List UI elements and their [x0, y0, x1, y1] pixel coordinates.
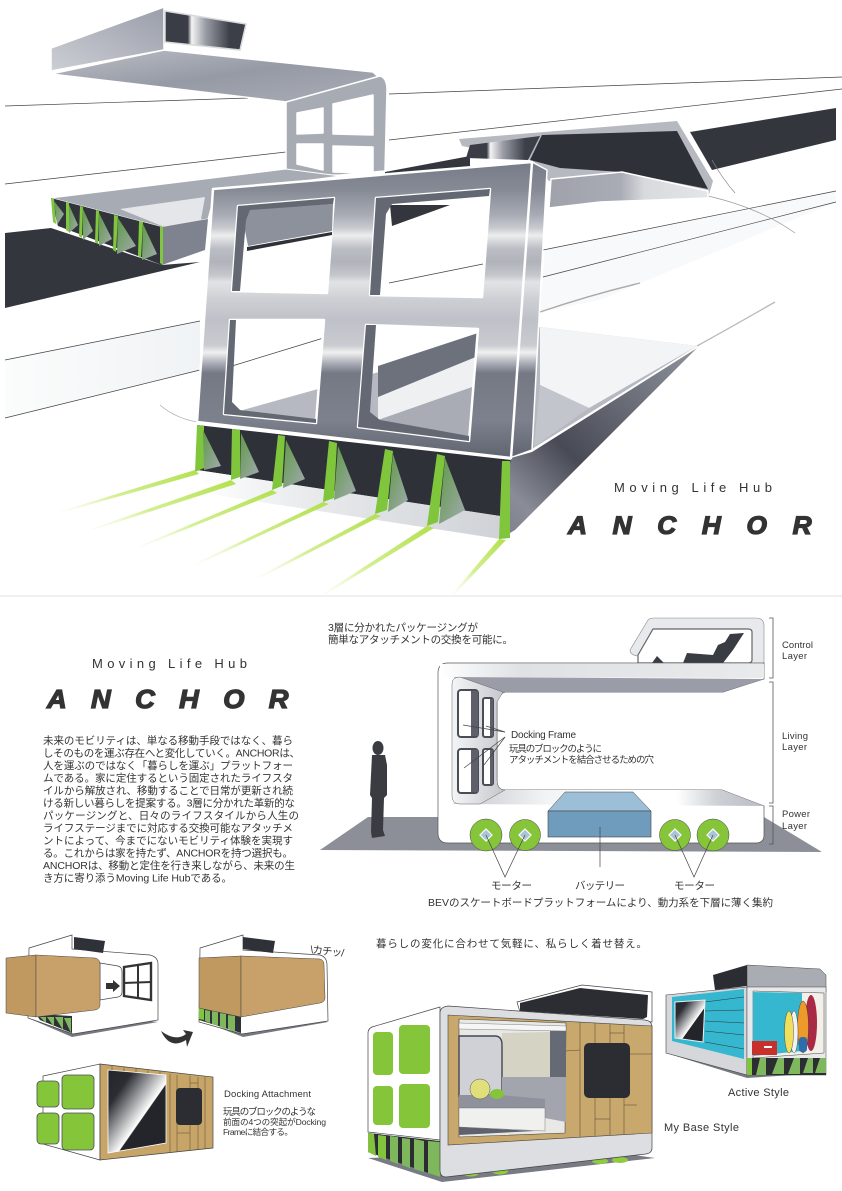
shelf — [459, 1023, 566, 1031]
body — [199, 935, 328, 1034]
left wall — [452, 677, 505, 804]
concept body text: き方に寄り添うMoving Life Hubである。 — [43, 872, 232, 884]
green teeth under main frame — [195, 425, 510, 539]
surfboards — [805, 995, 817, 1051]
leaf cushion — [490, 1089, 504, 1099]
motors — [470, 819, 729, 851]
main frame side wall — [510, 162, 547, 458]
concept body text: イルから解放され、移動することで日常が更新され続 — [43, 784, 294, 797]
concept body text: ムである。家に定住するという固定されたライフスタ — [43, 772, 293, 784]
power labels: BEVのスケートボードプラットフォームにより、動力系を下層に薄く集約 — [428, 896, 773, 909]
body front frame — [440, 1006, 652, 1177]
black roof — [713, 965, 747, 990]
click sound text: \カチッ/ — [310, 944, 345, 960]
floor behind main frame — [243, 327, 697, 458]
layer labels: Living — [782, 731, 808, 742]
teeth — [747, 1058, 826, 1075]
attachment box — [6, 955, 100, 1017]
large gradient window — [108, 1070, 166, 1153]
roof gradient — [440, 664, 764, 678]
power labels: モーター — [674, 880, 715, 892]
main floor underside white — [197, 470, 500, 539]
background perspective wash — [5, 191, 836, 418]
cushion — [470, 1079, 490, 1099]
docking attachment — [37, 1064, 326, 1160]
upper module roof panel — [51, 7, 164, 71]
floor — [459, 1127, 535, 1135]
control layer cab — [630, 618, 764, 665]
vehicle body — [438, 663, 764, 843]
hero subtitle: Moving Life Hub — [614, 480, 772, 495]
upper module frame — [286, 76, 387, 176]
main frame with four windows — [197, 162, 532, 458]
layer labels: Layer — [782, 651, 807, 662]
concept body text: る。これからは家を持たず、ANCHORを持つ選択も。 — [43, 846, 293, 860]
black roof — [520, 988, 648, 1019]
concept body text — [43, 734, 300, 884]
upper module visible through window — [241, 204, 333, 246]
attachment step 1 — [6, 935, 158, 1037]
battery — [548, 792, 651, 837]
living layer ceiling shade — [453, 677, 764, 692]
leader lines — [463, 725, 713, 877]
docking attachment note — [223, 1089, 326, 1137]
ground — [666, 1053, 826, 1078]
attachment left face — [43, 1064, 100, 1160]
docking frame annotation — [509, 730, 654, 766]
docking frame annotation: 玩具のブロックのように — [509, 743, 602, 755]
green light beams — [58, 470, 506, 596]
wheels — [463, 1157, 628, 1176]
my base style label: My Base Style — [664, 1122, 739, 1134]
ground — [368, 1150, 655, 1182]
right compartment — [747, 987, 826, 1075]
layer caption: 簡単なアタッチメントの交換を可能に。 — [328, 633, 513, 646]
active style label: Active Style — [728, 1087, 789, 1099]
small dark window — [176, 1088, 202, 1125]
docking attachment note: 前面の4つの突起がDocking — [223, 1116, 326, 1127]
docking frame windows — [458, 690, 493, 793]
3-layer side diagram — [320, 618, 822, 909]
active style vehicle — [666, 965, 826, 1078]
teeth — [36, 1014, 72, 1033]
my base style vehicle — [368, 985, 655, 1182]
dress-up caption: 暮らしの変化に合わせて気軽に、私らしく着せ替え。 — [376, 937, 647, 950]
concept title ANCHOR: ANCHOR — [46, 685, 289, 714]
docking attachment note: Frameに結合する。 — [223, 1126, 293, 1137]
concept body text: 未来のモビリティは、単なる移動手段ではなく、暮ら — [43, 734, 293, 747]
layer labels: Control — [782, 640, 813, 651]
person silhouette — [370, 741, 387, 838]
green windows — [373, 1025, 430, 1128]
teeth — [199, 1008, 241, 1033]
room interior — [459, 1019, 566, 1137]
right dark wall — [550, 1031, 566, 1077]
main frame lower dark base — [197, 425, 511, 516]
layer labels: Layer — [782, 742, 807, 753]
left face — [368, 1007, 440, 1140]
concept body text: しそのものを運ぶ存在へと変化していく。ANCHORは、 — [43, 746, 300, 760]
top band — [747, 965, 826, 992]
attachment wood face — [100, 1064, 213, 1160]
docking attachment note: Docking Attachment — [224, 1089, 311, 1100]
window rims — [224, 189, 490, 441]
concept body text: ライフステージまでに対応する交換可能なアタッチメ — [43, 822, 293, 834]
cockpit — [243, 937, 275, 953]
layer caption: 3層に分かれたパッケージングが — [328, 621, 478, 634]
ground — [320, 817, 822, 852]
upper module slab underside — [51, 50, 386, 102]
back wall — [502, 1032, 550, 1077]
living layer floor shade — [452, 790, 764, 806]
left partition — [459, 1036, 502, 1096]
ground — [28, 1015, 158, 1037]
bed — [459, 1095, 545, 1108]
upper module cockpit — [165, 11, 246, 50]
attached box — [199, 956, 325, 1017]
layer caption — [328, 621, 513, 646]
wood panelling — [448, 1015, 652, 1145]
power labels — [428, 880, 773, 909]
layer labels — [782, 640, 813, 832]
docking frame annotation: Docking Frame — [511, 730, 576, 741]
docking frame annotation: アタッチメントを結合させるための穴 — [509, 754, 654, 766]
upper module — [51, 7, 387, 265]
concept text panel — [43, 656, 300, 884]
cab seat — [683, 633, 744, 663]
teeth — [368, 1133, 440, 1177]
ground — [199, 1015, 328, 1037]
power labels: モーター — [491, 880, 532, 892]
louver lines — [705, 997, 744, 1049]
left body — [666, 987, 747, 1075]
curved arrow — [161, 1030, 193, 1047]
red box — [752, 1041, 777, 1055]
black wall screen — [584, 1043, 630, 1098]
concept body text: ける新しい暮らしを提案する。3層に分かれた革新的な — [43, 796, 295, 810]
concept body text: ANCHORは、移動と定住を行き来しながら、未来の生 — [43, 859, 295, 872]
section divider — [0, 595, 842, 597]
power labels: バッテリー — [575, 880, 625, 892]
concept body text: 人を運ぶのではなく「暮らしを運ぶ」プラットフォー — [43, 759, 293, 772]
layer labels: Power — [782, 809, 810, 820]
lower wall — [502, 1077, 566, 1122]
attachment step 2 — [199, 935, 345, 1037]
body — [28, 935, 158, 1034]
layer brackets — [769, 618, 773, 844]
canopy — [517, 985, 652, 1022]
docking attachment note: 玩具のブロックのような — [223, 1106, 316, 1118]
hero illustration: ANCHOR vehicle — [5, 7, 842, 596]
upper module teeth — [51, 198, 163, 265]
docking frame window — [124, 963, 151, 1000]
arrow — [106, 980, 120, 992]
cyan side panel — [672, 989, 744, 1059]
dark background band — [5, 108, 836, 308]
gradient window — [675, 1000, 705, 1042]
rear canopy and cockpit — [459, 121, 713, 208]
concept body text: パッケージングと、日々のライフスタイルから人生の — [43, 809, 299, 822]
hero title ANCHOR: ANCHOR — [567, 513, 812, 540]
side shadow wedge — [500, 348, 697, 539]
concept body text: ントによって、今までにないモビリティ体験を実現す — [43, 834, 293, 847]
four green docking protrusions — [37, 1075, 94, 1150]
concept subtitle: Moving Life Hub — [92, 656, 247, 671]
perspective hairlines — [5, 77, 842, 422]
upper module floor edge — [162, 219, 208, 265]
upper module floor — [51, 169, 340, 227]
opening — [100, 963, 122, 1000]
layer labels: Layer — [782, 821, 807, 832]
cockpit — [74, 937, 105, 953]
